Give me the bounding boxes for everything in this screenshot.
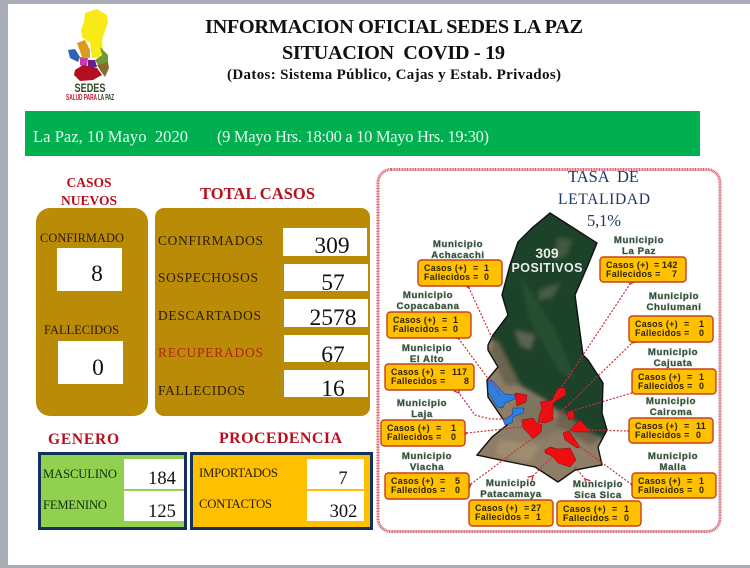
callout: Sica Sica xyxy=(557,479,641,526)
panel: procedencia: 7 xyxy=(338,469,348,489)
callout: La Paz: 142 xyxy=(662,260,678,270)
callout: Viacha: Viacha xyxy=(410,462,444,473)
logo: SEDES: SEDES xyxy=(74,83,106,95)
callout: Malla: 0 xyxy=(699,485,704,495)
callout: Sica Sica: = xyxy=(612,504,617,514)
panel: total casos: DESCARTADOS xyxy=(158,308,261,323)
callout: El Alto: = xyxy=(440,367,445,377)
callout: La Paz: Casos (+) xyxy=(606,260,649,270)
callout: Copacabana: Copacabana xyxy=(396,301,460,312)
callout: Laja: Laja xyxy=(411,409,433,420)
panel: total casos: RECUPERADOS xyxy=(158,345,263,360)
callout: La Paz: Fallecidos = xyxy=(606,269,661,279)
title xyxy=(205,16,583,83)
panel: total casos: 16 xyxy=(321,376,345,402)
callout: Cajuata: Casos (+) xyxy=(638,372,681,382)
callout: Copacabana: 0 xyxy=(453,324,458,334)
logo: SEDES: LA PAZ xyxy=(98,93,114,102)
callout: Cajuata: = xyxy=(687,372,692,382)
callout: Sica Sica: Fallecidos = xyxy=(563,513,618,523)
panel: genero xyxy=(40,454,186,528)
callout: El Alto: 8 xyxy=(464,376,469,386)
callout: La Paz: Municipio xyxy=(614,235,664,246)
panel: total casos: 57 xyxy=(321,270,345,296)
callout: Achacachi: Achacachi xyxy=(431,250,485,261)
callout: Chulumani: = xyxy=(684,319,689,329)
panel: genero: 184 xyxy=(148,469,176,489)
callout: Cairoma xyxy=(629,396,713,443)
callout: Malla: Municipio xyxy=(648,451,698,462)
callout: Laja: 1 xyxy=(451,423,456,433)
callout: Chulumani: Fallecidos = xyxy=(635,328,690,338)
panel: procedencia xyxy=(192,454,372,528)
callout: Achacachi: Fallecidos = xyxy=(424,272,479,282)
panel: casos nuevos: 8 xyxy=(91,261,103,287)
panel: total casos: 309 xyxy=(314,233,350,259)
date banner xyxy=(25,111,700,156)
callout: Achacachi xyxy=(418,239,502,286)
callout: Laja: Fallecidos = xyxy=(387,432,442,442)
heading: tasa de letalidad xyxy=(558,167,650,230)
callout: La Paz: La Paz xyxy=(622,246,656,257)
callout: Malla: Fallecidos = xyxy=(638,485,693,495)
callout: Malla: = xyxy=(687,476,692,486)
callout: Achacachi: = xyxy=(473,263,478,273)
date banner: (9 Mayo Hrs. 18:00 a 10 Mayo Hrs. 19:30) xyxy=(217,127,489,146)
callout: Viacha: Casos (+) xyxy=(391,476,434,486)
callout: Copacabana: Fallecidos = xyxy=(393,324,448,334)
title: (Datos: Sistema Público, Cajas y Estab. Privados) xyxy=(227,67,561,83)
callout: Cairoma: = xyxy=(684,421,689,431)
callout: Sica Sica: 0 xyxy=(624,513,629,523)
callout: El Alto xyxy=(385,343,474,390)
panel: genero: 125 xyxy=(148,502,176,522)
heading: genero: GENERO xyxy=(48,431,119,448)
callout: Cairoma: Fallecidos = xyxy=(635,430,690,440)
heading: casos nuevos xyxy=(61,175,117,208)
callout: Copacabana: 1 xyxy=(453,315,458,325)
callout: Chulumani: Chulumani xyxy=(647,302,701,313)
callout: Patacamaya: 1 xyxy=(536,512,541,522)
panel: procedencia: IMPORTADOS xyxy=(199,466,278,480)
panel: total casos xyxy=(155,208,370,416)
panel: procedencia: 302 xyxy=(330,502,357,522)
map: La Paz department: 309 xyxy=(535,245,559,261)
callout: Copacabana: Casos (+) xyxy=(393,315,436,325)
callout: Sica Sica: Casos (+) xyxy=(563,504,606,514)
panel: total casos: CONFIRMADOS xyxy=(158,233,263,248)
callout: Chulumani: Casos (+) xyxy=(635,319,678,329)
callout: El Alto: Casos (+) xyxy=(391,367,434,377)
callout: Patacamaya: Casos (+) xyxy=(475,503,518,513)
logo: SEDES: SALUD PARA xyxy=(66,93,97,102)
callout: Patacamaya: Fallecidos = xyxy=(475,512,530,522)
callout: Laja: Municipio xyxy=(397,398,447,409)
callout: Cairoma: 0 xyxy=(696,430,701,440)
panel: casos nuevos: FALLECIDOS xyxy=(44,323,119,337)
callout: El Alto: 117 xyxy=(452,367,467,377)
callout: Cairoma: Cairoma xyxy=(650,407,692,418)
panel: casos nuevos: CONFIRMADO xyxy=(40,231,124,245)
panel: total casos: 2578 xyxy=(310,305,356,331)
heading: tasa de letalidad: TASA DE xyxy=(568,167,639,186)
callout: El Alto: El Alto xyxy=(410,354,444,365)
callout: Viacha: = xyxy=(440,476,445,486)
callout: Patacamaya: = xyxy=(524,503,529,513)
heading: tasa de letalidad: LETALIDAD xyxy=(558,191,650,208)
callout: La Paz: 7 xyxy=(672,269,677,279)
callout: El Alto: Fallecidos = xyxy=(391,376,446,386)
panel: genero: MASCULINO xyxy=(43,467,117,481)
callout: El Alto: Municipio xyxy=(402,343,452,354)
red municipalities xyxy=(515,388,591,467)
callout: Cajuata: Cajuata xyxy=(654,358,692,369)
date banner: La Paz, 10 Mayo 2020 xyxy=(33,127,188,146)
callout: Viacha: Municipio xyxy=(402,451,452,462)
map: La Paz department: POSITIVOS xyxy=(512,261,582,275)
callout: Viacha: Fallecidos = xyxy=(391,485,446,495)
callout: Cairoma: 11 xyxy=(696,421,706,431)
callout: La Paz: = xyxy=(654,260,659,270)
panel: procedencia: CONTACTOS xyxy=(199,497,272,511)
callout: Achacachi: Municipio xyxy=(433,239,483,250)
callout: Achacachi: 1 xyxy=(484,263,489,273)
callout: La Paz xyxy=(600,235,686,282)
panel: map frame xyxy=(378,170,720,532)
heading: tasa de letalidad: 5,1% xyxy=(587,211,621,230)
callout: Achacachi: 0 xyxy=(484,272,489,282)
callout: Malla: Malla xyxy=(660,462,687,473)
heading: casos nuevos: NUEVOS xyxy=(61,193,117,208)
lake xyxy=(488,379,524,425)
callout: Sica Sica: Municipio xyxy=(573,479,623,490)
callout: Patacamaya: Patacamaya xyxy=(480,489,542,500)
logo: SEDES xyxy=(66,9,114,102)
callout: Copacabana: Municipio xyxy=(403,290,453,301)
panel: casos nuevos: 0 xyxy=(92,355,104,381)
callout: Cajuata: Fallecidos = xyxy=(638,381,693,391)
callout: Malla: 1 xyxy=(699,476,704,486)
callout: Sica Sica: 1 xyxy=(624,504,629,514)
callout: Malla xyxy=(632,451,716,498)
title: INFORMACION OFICIAL SEDES LA PAZ xyxy=(205,16,583,38)
callout: Copacabana: = xyxy=(442,315,447,325)
callout: Sica Sica: Sica Sica xyxy=(574,490,622,501)
callout: Achacachi: Casos (+) xyxy=(424,263,467,273)
callout: Viacha: 5 xyxy=(455,476,460,486)
callout: Copacabana xyxy=(387,290,471,338)
callout: Chulumani: 1 xyxy=(699,319,704,329)
callout: Patacamaya: Municipio xyxy=(486,478,536,489)
callout: Patacamaya xyxy=(469,478,553,526)
callout: Cajuata xyxy=(632,347,716,394)
callout: Cairoma: Municipio xyxy=(646,396,696,407)
callout: Laja: Casos (+) xyxy=(387,423,430,433)
callout: Cajuata: 0 xyxy=(699,381,704,391)
callout: Chulumani: 0 xyxy=(699,328,704,338)
callout: Malla: Casos (+) xyxy=(638,476,681,486)
panel: total casos: 67 xyxy=(321,342,345,368)
callout: Cajuata: 1 xyxy=(699,372,704,382)
callout: Laja: = xyxy=(436,423,441,433)
map: La Paz department xyxy=(476,212,608,483)
heading: procedencia: PROCEDENCIA xyxy=(219,430,342,447)
heading: total casos: TOTAL CASOS xyxy=(200,184,315,203)
panel: genero: FEMENINO xyxy=(43,498,107,512)
callout: Chulumani xyxy=(629,291,713,342)
callout: Cajuata: Municipio xyxy=(648,347,698,358)
panel: casos nuevos xyxy=(36,208,148,416)
callout: Cairoma: Casos (+) xyxy=(635,421,678,431)
callout: Viacha: 0 xyxy=(455,485,460,495)
callout: Laja: 0 xyxy=(451,432,456,442)
panel: total casos: SOSPECHOSOS xyxy=(158,270,258,285)
heading: casos nuevos: CASOS xyxy=(66,175,112,190)
arrows xyxy=(459,284,635,484)
panel: total casos: FALLECIDOS xyxy=(158,383,245,398)
callout: Patacamaya: 27 xyxy=(531,503,541,513)
callout: Chulumani: Municipio xyxy=(649,291,699,302)
callout: Viacha xyxy=(385,451,469,499)
callout: Laja xyxy=(381,398,465,446)
title: SITUACION COVID - 19 xyxy=(282,42,505,64)
